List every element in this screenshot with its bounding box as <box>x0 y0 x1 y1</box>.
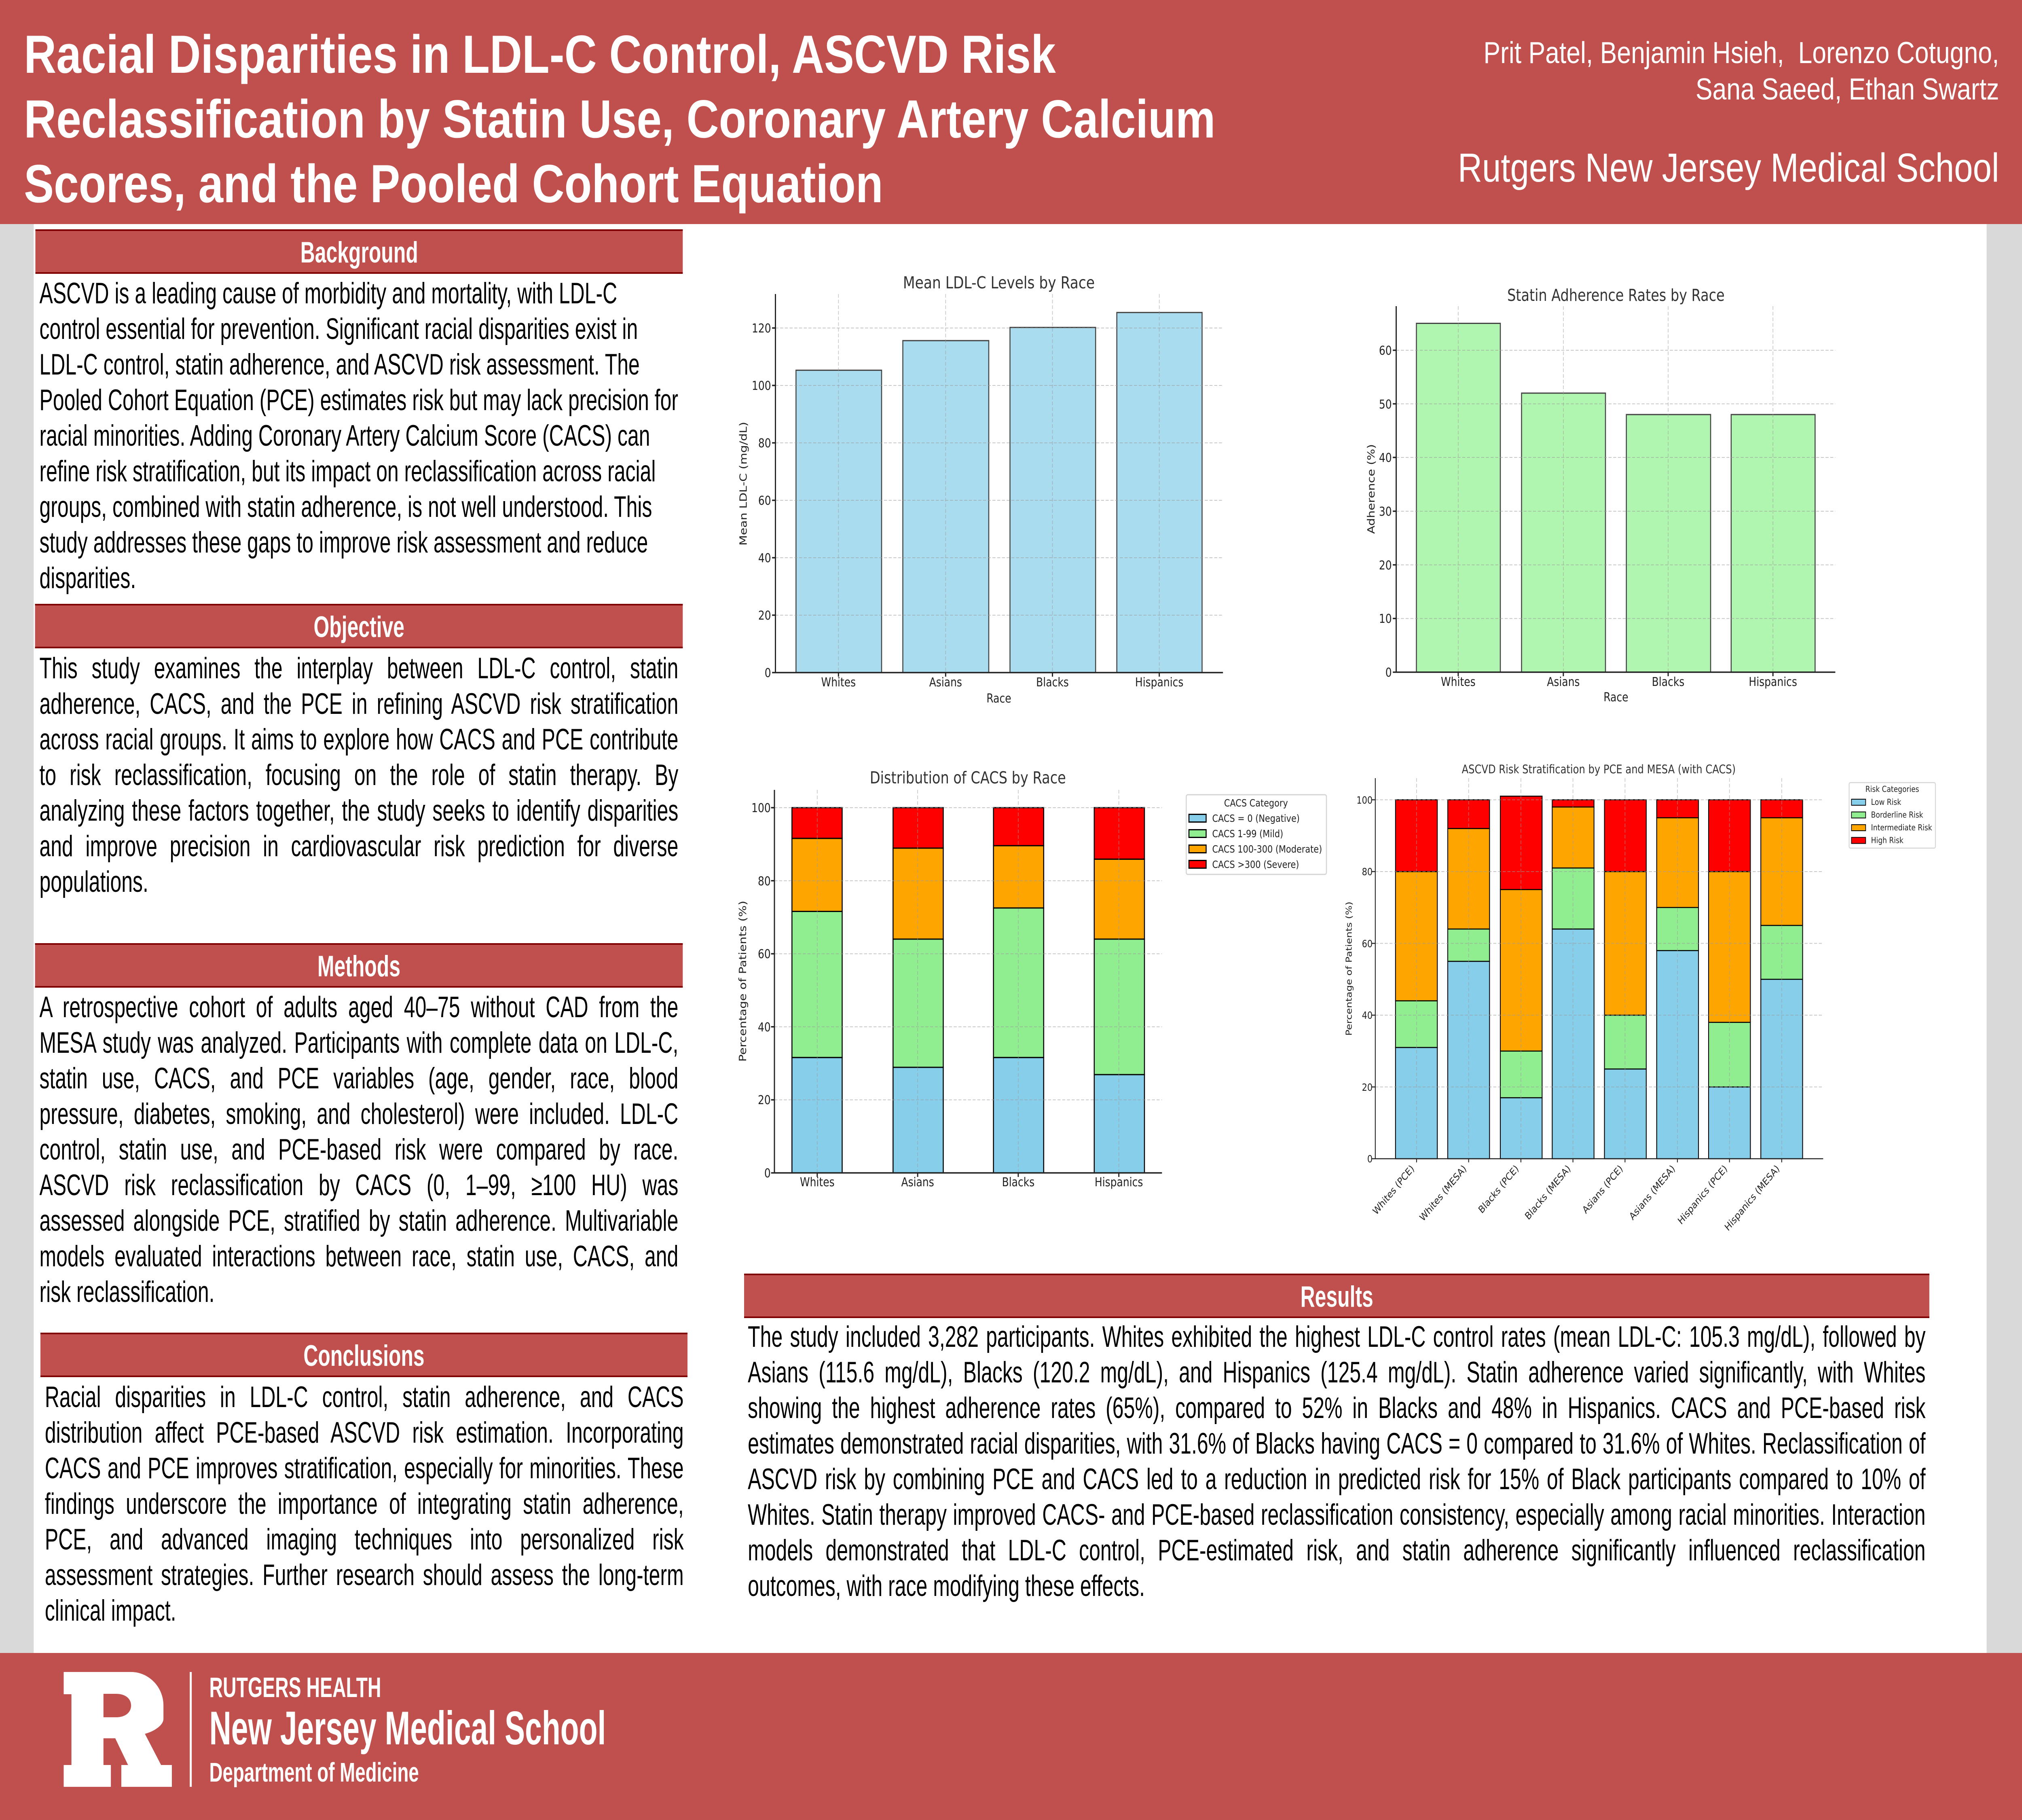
x tick labels: Asians <box>1547 675 1580 689</box>
text: Methods: statin use, CACS, and PCE variables (age, gender, race, blood <box>40 1062 678 1095</box>
institution: Rutgers New Jersey Medical School <box>1458 145 1999 190</box>
text: Results: Whites. Statin therapy improved CACS- and PCE-based reclassification consistency, especially among racial minorities. Interaction <box>748 1498 1926 1531</box>
x axis label: Race <box>1603 690 1628 705</box>
logo text: Department of Medicine: Department of Medicine <box>209 1757 419 1788</box>
chart: ASCVD Risk Stratification by PCE and MESA <box>1344 763 1935 1234</box>
x tick labels: Whites <box>821 675 856 690</box>
x tick labels: Asians <box>929 675 962 690</box>
y tick labels <box>1379 343 1392 680</box>
legend: CACS 1-99 (Mild) <box>1212 828 1283 840</box>
x tick labels: Whites (MESA) <box>1418 1163 1468 1224</box>
heading: Objective: Objective <box>313 611 404 643</box>
legend: High Risk <box>1871 836 1904 845</box>
text: Background: study addresses these gaps to improve risk assessment and reduce <box>40 526 648 559</box>
title: Racial Disparities in LDL-C Control, ASCVD Risk <box>24 25 1056 85</box>
chart: Statin Adherence Rates by Race <box>1365 286 1835 705</box>
y tick labels: 100 <box>1356 795 1373 806</box>
y tick labels: 40 <box>758 1020 771 1035</box>
x tick labels: Asians (MESA) <box>1628 1163 1677 1222</box>
x tick labels <box>1441 675 1797 689</box>
y axis label: Adherence (%) <box>1365 444 1377 534</box>
authors: Sana Saeed, Ethan Swartz <box>1696 72 1999 106</box>
y tick labels <box>752 321 771 680</box>
chart: Distribution of CACS by Race <box>736 768 1326 1189</box>
x tick labels: Blacks <box>1652 675 1684 689</box>
y axis label: Percentage of Patients (%) <box>1344 902 1354 1036</box>
x tick labels <box>821 675 1183 690</box>
text: Conclusions: Racial disparities in LDL-C control, statin adherence, and CACS <box>45 1381 684 1414</box>
x tick labels: Hispanics <box>1135 675 1183 690</box>
heading: Objective <box>35 604 683 648</box>
text: Background: control essential for prevention. Significant racial disparities exist in <box>40 313 638 345</box>
legend: CACS 100-300 (Moderate) <box>1212 844 1322 855</box>
bars <box>796 313 1202 673</box>
text: Objective: to risk reclassification, focusing on the role of statin therapy. By <box>40 759 678 791</box>
text: Objective: adherence, CACS, and the PCE in refining ASCVD risk stratification <box>40 688 678 720</box>
x tick labels: Blacks <box>1002 1175 1034 1189</box>
chart title: Mean LDL-C Levels by Race <box>903 273 1095 292</box>
text: Conclusions: findings underscore the importance of integrating statin adherence, <box>45 1488 684 1520</box>
x tick labels: Hispanics <box>1095 1175 1143 1189</box>
x tick labels: Hispanics <box>1749 675 1797 689</box>
y tick labels: 50 <box>1379 397 1392 412</box>
text: Results: outcomes, with race modifying these effects. <box>748 1570 1145 1602</box>
footer banner <box>0 1653 2022 1820</box>
text: Background: groups, combined with statin adherence, is not well understood. This <box>40 491 652 523</box>
x tick labels: Asians <box>901 1175 934 1189</box>
text: Conclusions: PCE, and advanced imaging techniques into personalized risk <box>45 1523 684 1556</box>
y tick labels: 80 <box>758 874 771 889</box>
legend: Borderline Risk <box>1871 810 1923 820</box>
y axis label: Mean LDL-C (mg/dL) <box>737 422 749 546</box>
chart: Mean LDL-C Levels by Race <box>737 273 1223 706</box>
axes and ticks <box>1393 306 1835 676</box>
stacked bars <box>792 808 1144 1173</box>
y tick labels: 60 <box>758 493 771 508</box>
header banner <box>0 0 2022 224</box>
legend <box>1849 783 1935 848</box>
x tick labels: Asians (PCE) <box>1581 1163 1625 1216</box>
bars <box>1416 324 1815 672</box>
text: Results: The study included 3,282 participants. Whites exhibited the highest LDL-C control rates (mean LDL-C: 105.3 mg/dL), followed by <box>748 1321 1926 1353</box>
y tick labels: 40 <box>1362 1010 1373 1022</box>
authors: Prit Patel, Benjamin Hsieh, Lorenzo Cotugno, <box>1483 36 1999 70</box>
text: Background: ASCVD is a leading cause of morbidity and mortality, with LDL-C <box>40 277 617 310</box>
authors <box>1483 34 1999 107</box>
y tick labels: 60 <box>758 947 771 961</box>
legend: Low Risk <box>1871 798 1901 807</box>
y tick labels: 80 <box>758 436 771 451</box>
y tick labels: 0 <box>1367 1153 1373 1165</box>
heading: Background <box>36 229 683 274</box>
text: Background: LDL-C control, statin adherence, and ASCVD risk assessment. The <box>40 348 640 381</box>
text: Objective <box>40 651 678 900</box>
x tick labels: Whites (PCE) <box>1371 1163 1416 1217</box>
y tick labels: 30 <box>1379 504 1392 519</box>
text: Results: estimates demonstrated racial disparities, with 31.6% of Blacks having CACS = 0 compared to 31.6% of Whites. Reclassification of <box>748 1427 1926 1460</box>
x tick labels: Hispanics (MESA) <box>1723 1163 1782 1234</box>
heading: Conclusions <box>40 1333 687 1377</box>
y tick labels: 40 <box>1379 451 1392 465</box>
legend <box>1186 795 1326 874</box>
legend: CACS = 0 (Negative) <box>1212 813 1300 825</box>
y tick labels: 120 <box>752 321 771 336</box>
y tick labels: 60 <box>1362 938 1373 950</box>
chart title: Distribution of CACS by Race <box>870 768 1066 787</box>
text: Objective: analyzing these factors together, the study seeks to identify disparities <box>40 794 678 827</box>
y tick labels: 80 <box>1362 866 1373 878</box>
text: Objective: populations. <box>40 866 148 898</box>
heading: Conclusions: Conclusions <box>303 1340 425 1372</box>
text: Background: Pooled Cohort Equation (PCE) estimates risk but may lack precision for <box>40 384 678 417</box>
text: Background: racial minorities. Adding Coronary Artery Calcium Score (CACS) can <box>40 419 650 452</box>
logo: Rutgers R <box>64 1672 172 1787</box>
text: Conclusions: distribution affect PCE-based ASCVD risk estimation. Incorporating <box>45 1416 684 1449</box>
title: Reclassification by Statin Use, Coronary Artery Calcium <box>24 89 1215 149</box>
y tick labels: 100 <box>752 379 771 393</box>
y axis label: Percentage of Patients (%) <box>736 901 749 1062</box>
text: Objective: and improve precision in cardiovascular risk prediction for diverse <box>40 830 678 863</box>
legend: CACS >300 (Severe) <box>1212 859 1299 871</box>
y tick labels <box>751 801 771 1181</box>
text: Conclusions: clinical impact. <box>45 1594 176 1627</box>
chart title: ASCVD Risk Stratification by PCE and MESA (with CACS) <box>1462 763 1736 777</box>
y tick labels: 0 <box>765 666 771 680</box>
logo divider <box>190 1672 192 1787</box>
text: Methods: A retrospective cohort of adults aged 40–75 without CAD from the <box>40 991 678 1024</box>
text: Conclusions: CACS and PCE improves stratification, especially for minorities. These <box>45 1452 684 1485</box>
stacked bars <box>1396 796 1803 1159</box>
heading: Background: Background <box>300 236 418 269</box>
title: Scores, and the Pooled Cohort Equation <box>24 154 883 214</box>
text: Methods: pressure, diabetes, smoking, and cholesterol) were included. LDL-C <box>40 1098 678 1130</box>
y tick labels: 60 <box>1379 343 1392 358</box>
legend: Risk Categories <box>1865 785 1919 794</box>
heading: Results <box>744 1274 1929 1318</box>
axes and ticks <box>1372 778 1823 1162</box>
text: Background <box>40 276 678 596</box>
grid <box>1396 306 1835 672</box>
x tick labels <box>1371 1163 1782 1234</box>
logo text: New Jersey Medical School: New Jersey Medical School <box>209 1702 606 1754</box>
heading: Results: Results <box>1300 1280 1373 1313</box>
y tick labels: 20 <box>758 608 771 623</box>
y tick labels: 20 <box>758 1093 771 1107</box>
text: Results: showing the highest adherence rates (65%), compared to 52% in Blacks and 48% in Hispanics. CACS and PCE-based risk <box>748 1392 1926 1424</box>
x tick labels: Blacks (PCE) <box>1477 1163 1521 1216</box>
y tick labels: 0 <box>764 1166 771 1181</box>
y tick labels: 100 <box>751 801 771 815</box>
x tick labels: Whites <box>800 1175 835 1189</box>
axes and ticks <box>772 294 1223 677</box>
text: Objective: across racial groups. It aims to explore how CACS and PCE contribute <box>40 723 678 756</box>
text: Conclusions <box>45 1380 684 1629</box>
text: Methods <box>40 990 678 1310</box>
text: Methods: models evaluated interactions between race, statin use, CACS, and <box>40 1240 678 1273</box>
heading: Methods: Methods <box>317 950 400 983</box>
x tick labels: Whites <box>1441 675 1476 689</box>
text: Results <box>748 1319 1926 1604</box>
y tick labels: 0 <box>1385 665 1392 680</box>
title <box>24 22 1271 216</box>
legend: Intermediate Risk <box>1871 823 1932 832</box>
text: Background: refine risk stratification, but its impact on reclassification across racial <box>40 455 656 488</box>
right grey margin <box>1986 224 2022 1653</box>
x tick labels: Blacks <box>1036 675 1069 690</box>
logo text: Rutgers Health: RUTGERS HEALTH <box>209 1672 381 1703</box>
grid <box>776 294 1223 673</box>
y tick labels: 20 <box>1362 1082 1373 1094</box>
x tick labels <box>800 1175 1143 1189</box>
left grey margin <box>0 224 34 1653</box>
text: Conclusions: assessment strategies. Further research should assess the long-term <box>45 1559 684 1591</box>
text: Results: Asians (115.6 mg/dL), Blacks (120.2 mg/dL), and Hispanics (125.4 mg/dL). Statin adherence varied significantly, with Whites <box>748 1356 1926 1389</box>
text: Results: ASCVD risk by combining PCE and CACS led to a reduction in predicted risk for 15% of Black participants compared to 10% of <box>748 1463 1926 1496</box>
text: Results: models demonstrated that LDL-C control, PCE-estimated risk, and statin adherence significantly influenced reclassification <box>748 1534 1926 1567</box>
text: Methods: risk reclassification. <box>40 1276 214 1308</box>
text: Methods: assessed alongside PCE, stratified by statin adherence. Multivariable <box>40 1204 678 1237</box>
y tick labels: 10 <box>1379 612 1392 626</box>
text: Methods: control, statin use, and PCE-based risk were compared by race. <box>40 1133 678 1166</box>
axes and ticks <box>771 790 1162 1177</box>
heading: Methods <box>35 943 683 988</box>
grid <box>1375 778 1823 1159</box>
x axis label: Race <box>986 691 1011 706</box>
legend: CACS Category <box>1224 798 1288 809</box>
y tick labels: 20 <box>1379 558 1392 573</box>
grid <box>774 790 1162 1173</box>
y tick labels <box>1356 795 1373 1165</box>
x tick labels: Hispanics (PCE) <box>1676 1163 1729 1227</box>
x tick labels: Blacks (MESA) <box>1523 1163 1573 1222</box>
text: Methods: ASCVD risk reclassification by CACS (0, 1–99, ≥100 HU) was <box>40 1169 678 1202</box>
text: Objective: This study examines the interplay between LDL-C control, statin <box>40 652 678 685</box>
text: Background: disparities. <box>40 562 136 595</box>
y tick labels: 40 <box>758 551 771 565</box>
chart title: Statin Adherence Rates by Race <box>1507 286 1725 305</box>
text: Methods: MESA study was analyzed. Participants with complete data on LDL-C, <box>40 1026 678 1059</box>
